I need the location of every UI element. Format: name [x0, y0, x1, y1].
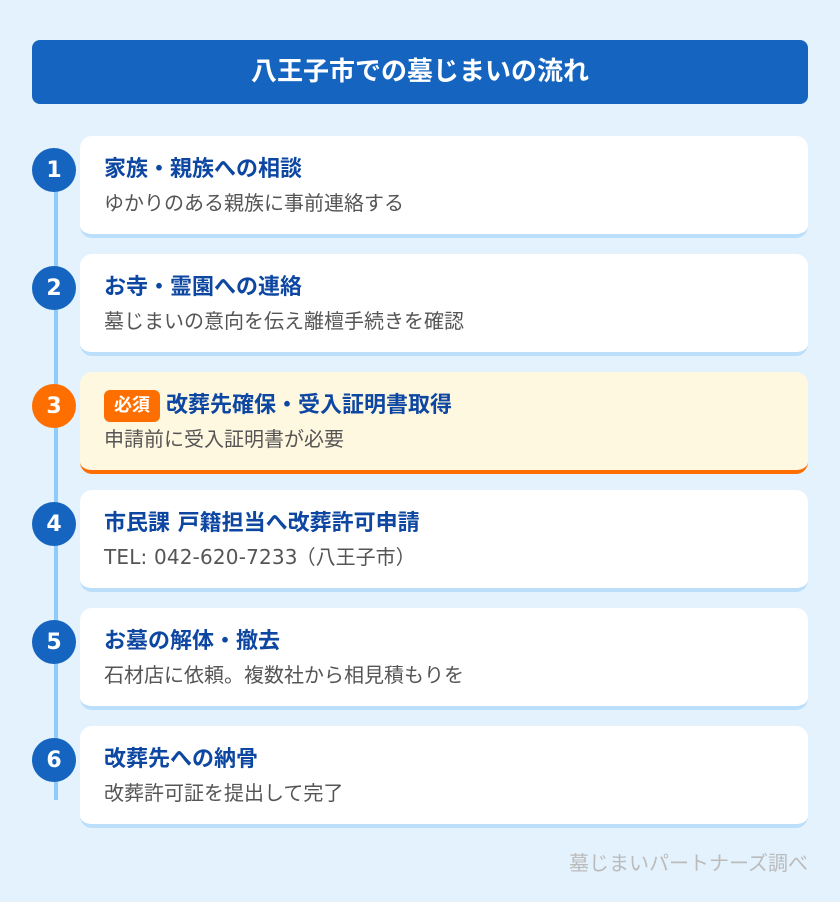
- step 4 heading: 市民課 戸籍担当へ改葬許可申請: [104, 511, 420, 536]
- step 6 number: 6: [46, 748, 62, 773]
- step 6 text: 改葬許可証を提出して完了: [104, 781, 343, 805]
- step 2 number: 2: [46, 276, 62, 301]
- step 3 number: [32, 384, 76, 428]
- panel: step 4: [80, 490, 808, 592]
- step 2 number: [32, 266, 76, 310]
- timeline line: [54, 170, 58, 800]
- panel: step 3 required: [80, 372, 808, 474]
- title: [32, 40, 808, 104]
- step 3 number: 3: [46, 394, 62, 419]
- panel: step 1: [80, 136, 808, 238]
- step 5 number: [32, 620, 76, 664]
- step 6 heading: 改葬先への納骨: [104, 747, 258, 772]
- step 1 number: 1: [46, 158, 62, 183]
- step 3 text: 申請前に受入証明書が必要: [104, 427, 344, 451]
- step 3 heading with badge: [104, 390, 452, 422]
- step 1 number: [32, 148, 76, 192]
- step 2 text: 墓じまいの意向を伝え離檀手続きを確認: [104, 309, 464, 333]
- step 4 number: 4: [46, 512, 62, 537]
- panel: step 5: [80, 608, 808, 710]
- step 5 text: 石材店に依頼。複数社から相見積もりを: [104, 663, 464, 687]
- step 1 heading: 家族・親族への相談: [104, 157, 302, 182]
- step 2 heading: お寺・霊園への連絡: [104, 275, 302, 300]
- step 1 text: ゆかりのある親族に事前連絡する: [104, 191, 404, 215]
- step 6 number: [32, 738, 76, 782]
- step 3 heading with badge: 必須: [114, 395, 150, 416]
- source note: 墓じまいパートナーズ調べ: [569, 851, 808, 875]
- title: 八王子市での墓じまいの流れ: [251, 57, 589, 87]
- step 4 text: TEL: 042-620-7233（八王子市）: [104, 545, 416, 569]
- step 3 heading with badge: 改葬先確保・受入証明書取得: [166, 393, 452, 418]
- step 4 number: [32, 502, 76, 546]
- step 5 heading: お墓の解体・撤去: [104, 629, 280, 654]
- step 5 number: 5: [46, 630, 62, 655]
- panel: step 6: [80, 726, 808, 828]
- panel: step 2: [80, 254, 808, 356]
